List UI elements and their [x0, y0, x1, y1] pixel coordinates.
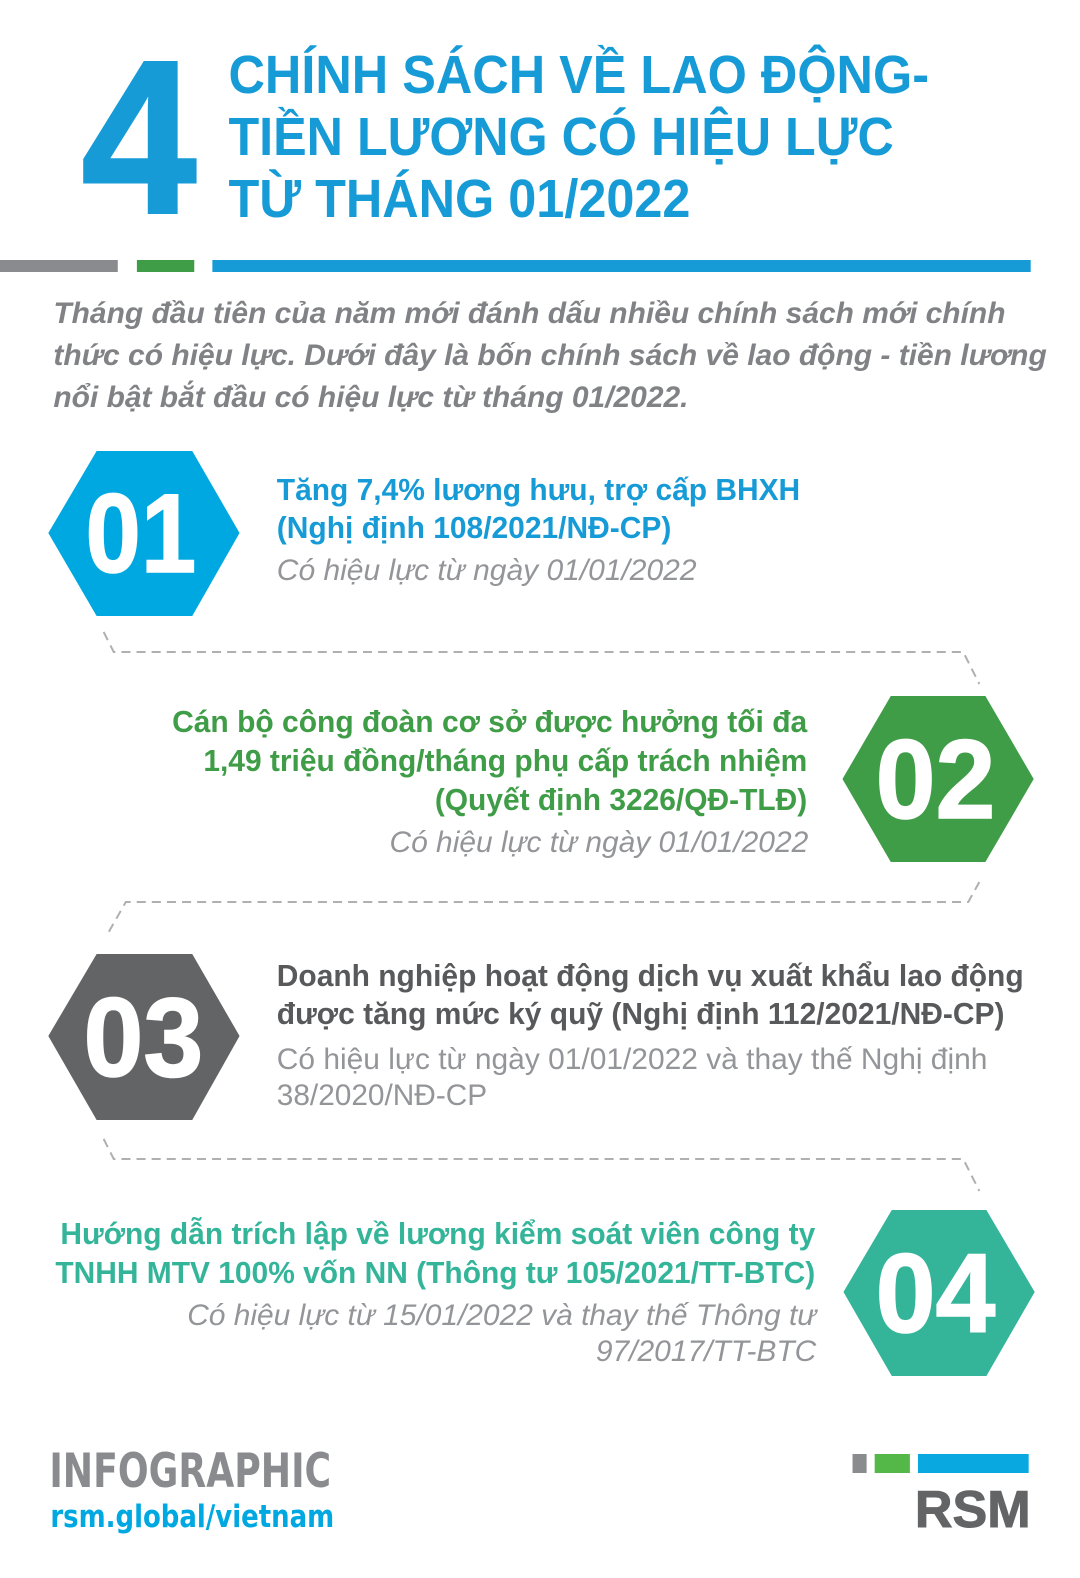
item 02 — [172, 696, 1034, 862]
icon: hexagon 01 — [48, 451, 240, 616]
icon: hexagon 03: 03 — [84, 974, 203, 1100]
policy 04 title: Hướng dẫn trích lập về lương kiểm soát viên công ty — [60, 1216, 816, 1251]
footer website: rsm.global/vietnam — [50, 1499, 334, 1535]
policy 04 date: Có hiệu lực từ 15/01/2022 và thay thế Thông tư — [187, 1299, 818, 1332]
connector 03 to 04 — [104, 1139, 979, 1191]
icon: hexagon 04 — [843, 1210, 1035, 1376]
item 04 — [55, 1210, 1035, 1376]
policy 02 title — [172, 704, 808, 817]
title: CHÍNH SÁCH VỀ LAO ĐỘNG- — [228, 44, 929, 105]
policy 01 title — [277, 472, 800, 545]
RSM logo — [853, 1454, 1031, 1539]
policy 02 title: 1,49 triệu đồng/tháng phụ cấp trách nhiệm — [203, 743, 807, 778]
policy 03 title: được tăng mức ký quỹ (Nghị định 112/2021/NĐ-CP) — [277, 996, 1005, 1031]
policy 03 title: Doanh nghiệp hoạt động dịch vụ xuất khẩu lao động — [277, 958, 1024, 993]
policy 03 title — [277, 958, 1024, 1031]
intro paragraph: thức có hiệu lực. Dưới đây là bốn chính sách về lao động - tiền lương — [53, 339, 1047, 372]
intro paragraph: Tháng đầu tiên của năm mới đánh dấu nhiều chính sách mới chính — [53, 297, 1006, 330]
icon: hexagon 01: 01 — [86, 470, 196, 596]
policy 03 date — [277, 1043, 987, 1112]
icon: hexagon 03 — [48, 954, 240, 1120]
title — [228, 44, 929, 229]
item 03 — [48, 954, 1024, 1120]
footer label: INFOGRAPHIC — [49, 1444, 331, 1499]
policy 02 title: (Quyết định 3226/QĐ-TLĐ) — [435, 782, 807, 817]
connector 02 to 03 — [109, 882, 979, 932]
policy 04 title — [55, 1216, 816, 1290]
icon: hexagon 02 — [842, 696, 1034, 862]
intro paragraph — [53, 297, 1047, 414]
policy 01 title: (Nghị định 108/2021/NĐ-CP) — [277, 510, 671, 545]
policy 04 date — [187, 1299, 818, 1368]
policy 01 date: Có hiệu lực từ ngày 01/01/2022 — [277, 554, 697, 587]
big number 4: 4 — [82, 16, 196, 259]
intro paragraph: nổi bật bắt đầu có hiệu lực từ tháng 01/2022. — [53, 380, 688, 414]
policy 03 date: Có hiệu lực từ ngày 01/01/2022 và thay thế Nghị định — [277, 1043, 987, 1076]
item 01 — [48, 451, 800, 616]
header divider bars — [0, 260, 1031, 272]
policy 03 date: 38/2020/NĐ-CP — [277, 1079, 487, 1112]
policy 04 date: 97/2017/TT-BTC — [596, 1335, 817, 1368]
policy 02 date: Có hiệu lực từ ngày 01/01/2022 — [390, 826, 808, 859]
icon: hexagon 04: 04 — [876, 1230, 995, 1356]
title: TỪ THÁNG 01/2022 — [228, 169, 690, 229]
policy 04 title: TNHH MTV 100% vốn NN (Thông tư 105/2021/TT-BTC) — [55, 1255, 815, 1290]
title: TIỀN LƯƠNG CÓ HIỆU LỰC — [228, 106, 894, 167]
icon: hexagon 02: 02 — [876, 716, 995, 842]
RSM logo: RSM — [915, 1481, 1031, 1539]
policy 01 title: Tăng 7,4% lương hưu, trợ cấp BHXH — [277, 472, 800, 507]
policy 02 title: Cán bộ công đoàn cơ sở được hưởng tối đa — [172, 704, 808, 739]
connector 01 to 02 — [104, 632, 979, 684]
